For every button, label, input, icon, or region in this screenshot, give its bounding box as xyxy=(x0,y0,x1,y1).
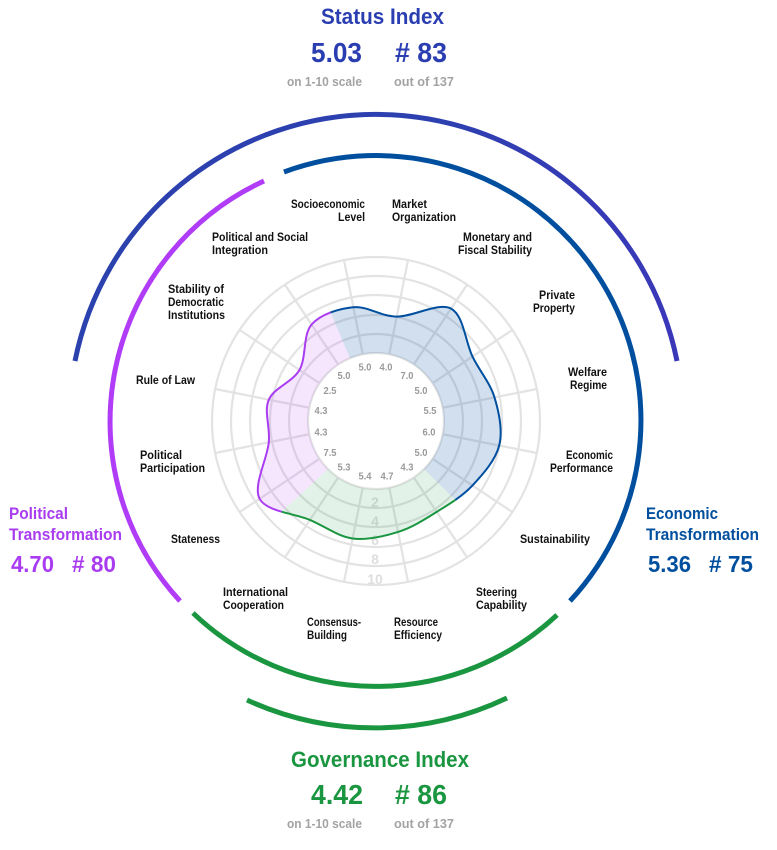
label: Sustainability: Sustainability xyxy=(520,532,590,546)
heading: Political Transformation: # 80 xyxy=(72,551,116,577)
label: Consensus-Building: Consensus- xyxy=(307,615,361,629)
heading: Governance Index xyxy=(287,747,470,831)
label: Welfare Regime: Regime xyxy=(570,378,607,392)
heading: Status Index: out of 137 xyxy=(394,74,454,89)
inner value labels: 4.3 xyxy=(400,462,414,474)
label: Market Organization xyxy=(392,197,456,224)
inner value labels: 7.5 xyxy=(324,448,337,459)
label: Political Participation xyxy=(140,448,205,475)
label: Economic Performance: Economic xyxy=(566,448,613,462)
heading: Governance Index: # 86 xyxy=(395,779,447,810)
heading: Economic Transformation: Economic xyxy=(646,504,718,523)
label: Private Property xyxy=(533,288,575,315)
arc: governance transformation xyxy=(193,613,557,686)
heading: Status Index: # 83 xyxy=(395,37,447,68)
label: Resource Efficiency: Resource xyxy=(394,615,438,629)
arc: status index xyxy=(75,114,677,361)
inner value labels: 4.0 xyxy=(380,362,393,374)
scale numbers: 10 xyxy=(367,571,383,587)
inner value labels: 5.0 xyxy=(338,371,351,382)
inner value labels: 5.3 xyxy=(338,462,351,474)
area: governance xyxy=(282,469,455,539)
label: Socioeconomic Level: Socioeconomic xyxy=(291,197,365,211)
label: Socioeconomic Level xyxy=(291,197,365,224)
label: Monetary and Fiscal Stability xyxy=(458,230,532,257)
heading: Status Index: on 1-10 scale xyxy=(287,74,362,89)
label: International Cooperation: Cooperation xyxy=(223,598,284,612)
heading: Economic Transformation xyxy=(646,504,759,577)
arc: economic transformation xyxy=(284,156,641,601)
heading: Governance Index: out of 137 xyxy=(394,816,454,831)
label: Monetary and Fiscal Stability: Monetary and xyxy=(463,230,532,244)
area: political transformation xyxy=(258,312,350,512)
label: Steering Capability: Capability xyxy=(476,598,527,612)
arc: political transformation xyxy=(110,181,264,601)
scale numbers: 4 xyxy=(371,513,379,529)
label: Economic Performance: Performance xyxy=(550,461,613,475)
label: Market Organization: Market xyxy=(392,197,427,211)
label: Political Participation: Participation xyxy=(140,461,205,475)
label: Welfare Regime: Welfare xyxy=(568,365,607,379)
inner value labels: 5.0 xyxy=(414,386,428,397)
inner value labels: 5.0 xyxy=(358,362,372,374)
heading: Economic Transformation: # 75 xyxy=(709,551,753,577)
inner value labels: 5.4 xyxy=(358,472,372,482)
label: Monetary and Fiscal Stability: Fiscal Stability xyxy=(458,243,532,257)
label: International Cooperation xyxy=(223,585,288,612)
heading: Economic Transformation: Transformation xyxy=(646,525,759,544)
inner value labels: 7.0 xyxy=(400,371,414,382)
label: Welfare Regime xyxy=(568,365,607,392)
label: Socioeconomic Level: Level xyxy=(338,210,365,224)
heading: Political Transformation: 4.70 xyxy=(11,551,54,577)
label: Political and Social Integration: Integration xyxy=(212,243,268,257)
inner value labels: 5.5 xyxy=(424,406,437,417)
heading: Status Index xyxy=(287,4,454,89)
label: Stability of Democratic Institutions xyxy=(168,282,225,322)
label: Stability of Democratic Institutions: Institutions xyxy=(168,308,225,322)
inner value labels xyxy=(314,362,437,482)
area: economic transformation xyxy=(331,307,501,500)
label: Steering Capability: Steering xyxy=(476,585,517,599)
scale numbers: 8 xyxy=(371,551,379,567)
label: Private Property: Property xyxy=(533,301,575,315)
arc: governance index xyxy=(247,698,507,728)
inner value labels: 4.3 xyxy=(314,428,328,438)
heading: Economic Transformation: 5.36 xyxy=(648,551,691,577)
label: Resource Efficiency: Efficiency xyxy=(394,628,442,642)
label: Resource Efficiency xyxy=(394,615,442,642)
heading: Status Index: Status Index xyxy=(321,4,445,29)
heading: Governance Index: on 1-10 scale xyxy=(287,816,362,831)
inner value labels: 2.5 xyxy=(324,386,337,397)
radar grid xyxy=(212,257,540,585)
inner value labels: 6.0 xyxy=(422,428,436,438)
scale numbers xyxy=(367,494,383,587)
heading: Political Transformation: Political xyxy=(9,504,68,523)
scale numbers: 2 xyxy=(371,494,379,510)
label: Stateness: Stateness xyxy=(171,532,220,546)
label: Stability of Democratic Institutions: Democratic xyxy=(168,295,224,309)
heading: Governance Index: 4.42 xyxy=(311,779,363,810)
label: Market Organization: Organization xyxy=(392,210,456,224)
label: Steering Capability xyxy=(476,585,527,612)
inner value labels: 5.0 xyxy=(414,448,428,459)
label: Private Property: Private xyxy=(539,288,575,302)
heading: Political Transformation: Transformation xyxy=(9,525,122,544)
label: Stability of Democratic Institutions: Stability of xyxy=(168,282,225,296)
heading: Status Index: 5.03 xyxy=(311,37,362,68)
scale numbers: 6 xyxy=(371,532,379,548)
label: Political and Social Integration: Political and Social xyxy=(212,230,308,244)
label: Rule of Law: Rule of Law xyxy=(136,373,196,387)
inner value labels: 4.7 xyxy=(380,472,394,482)
label: Economic Performance xyxy=(550,448,613,475)
label: Political and Social Integration xyxy=(212,230,308,257)
heading: Political Transformation xyxy=(9,504,122,577)
label: Consensus-Building xyxy=(307,615,361,642)
heading: Governance Index: Governance Index xyxy=(291,747,470,772)
label: International Cooperation: International xyxy=(223,585,288,599)
inner value labels: 4.3 xyxy=(314,406,328,417)
label: Consensus-Building: Building xyxy=(307,628,347,642)
label: Political Participation: Political xyxy=(140,448,182,462)
